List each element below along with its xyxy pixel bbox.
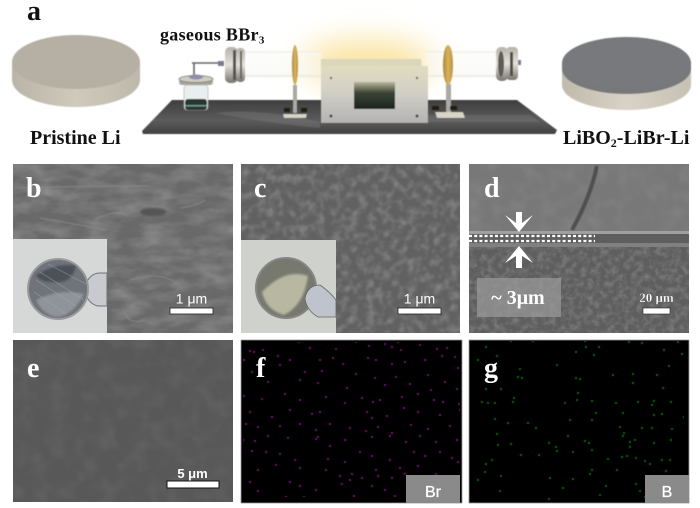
furnace glow bbox=[302, 40, 434, 84]
label: LiBO2-LiBr-Li: LiBO bbox=[563, 127, 611, 149]
modified lithium disc bbox=[562, 37, 691, 110]
label: LiBO2-LiBr-Li: -LiBr-Li bbox=[617, 127, 690, 149]
label: gaseous BBr3: gaseous BBr bbox=[160, 24, 259, 44]
scale bar bbox=[170, 294, 214, 314]
label: Pristine Li: Pristine Li bbox=[30, 127, 121, 149]
scale bar bbox=[167, 466, 219, 488]
panel g: B elemental map bbox=[469, 340, 689, 503]
label c: c bbox=[254, 173, 266, 204]
Br tag bbox=[406, 475, 460, 503]
right flange bbox=[496, 47, 521, 81]
Br signal dots bbox=[243, 342, 460, 497]
label e: e bbox=[27, 353, 39, 384]
quartz tube bbox=[244, 51, 498, 77]
scale bar bbox=[398, 294, 442, 314]
panel b: pristine Li SEM bbox=[13, 164, 233, 333]
left flange bbox=[225, 47, 245, 83]
scale bar: 1 μm bbox=[176, 290, 207, 306]
label g: g bbox=[484, 353, 498, 384]
arrows bbox=[505, 212, 533, 268]
panel f: Br elemental map bbox=[241, 340, 462, 503]
label: gaseous BBr3: 3 bbox=[259, 34, 265, 46]
tube furnace bbox=[321, 59, 428, 123]
scale bar: 5 μm bbox=[177, 466, 208, 481]
Br tag: Br bbox=[425, 484, 442, 501]
pristine lithium disc bbox=[12, 35, 140, 107]
panel e: SEM low magnification bbox=[13, 340, 233, 502]
inset photo bbox=[241, 240, 336, 333]
scale bar bbox=[640, 293, 674, 314]
label: LiBO2-LiBr-Li: 2 bbox=[611, 136, 617, 150]
label d: d bbox=[484, 173, 500, 204]
thickness label: ~ 3μm bbox=[491, 287, 545, 309]
base plate bbox=[142, 100, 557, 134]
label b: b bbox=[26, 173, 42, 204]
B signal dots bbox=[472, 341, 684, 503]
inset photo bbox=[13, 239, 107, 333]
panel c: treated Li SEM bbox=[241, 164, 460, 333]
thickness label bbox=[477, 278, 561, 317]
B tag: B bbox=[662, 484, 672, 501]
right gold support bbox=[432, 45, 465, 118]
panel a: synthesis schematic bbox=[12, 0, 691, 150]
panel d: cross-section SEM bbox=[469, 164, 689, 333]
scale bar: 20 μm bbox=[639, 290, 674, 305]
surface ridges bbox=[14, 186, 205, 321]
left gold support bbox=[283, 45, 307, 118]
dotted layer markers bbox=[469, 236, 595, 241]
scale bar: 1 μm bbox=[404, 290, 435, 306]
B tag bbox=[645, 475, 689, 503]
label f: f bbox=[256, 353, 266, 384]
precursor vial bbox=[179, 61, 224, 110]
